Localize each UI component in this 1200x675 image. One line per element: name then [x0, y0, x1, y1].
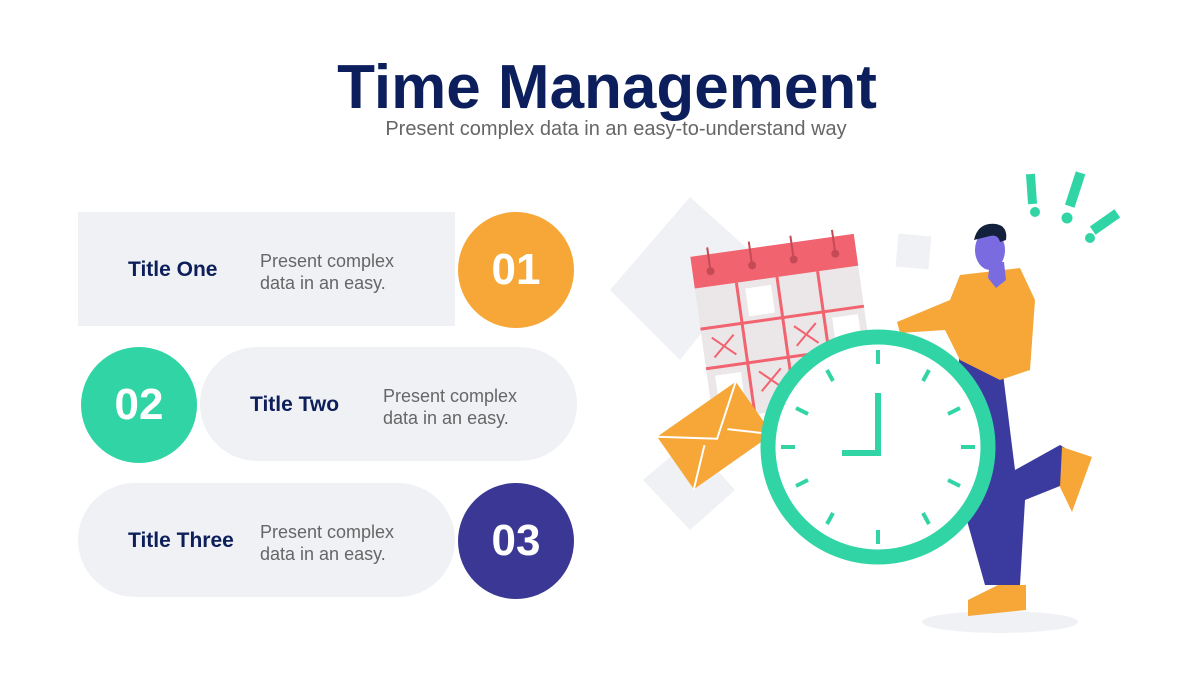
icon: exclamation marks	[1026, 171, 1120, 243]
badge 03: 03	[492, 516, 540, 565]
panel: item two	[81, 347, 577, 463]
text: item one description: Present complex	[260, 251, 394, 271]
panel: item one	[78, 212, 574, 328]
heading: Title One: Title One	[128, 258, 217, 281]
badge 01	[458, 212, 574, 328]
badge 02: 02	[115, 380, 163, 429]
text: item three description: data in an easy.	[260, 544, 386, 564]
text: item two description	[383, 386, 517, 428]
heading: Title Two: Title Two	[250, 393, 339, 416]
icon: calendar	[689, 227, 877, 420]
text: item one description	[260, 251, 394, 293]
badge 01: 01	[492, 245, 540, 294]
person	[897, 224, 1092, 616]
text: item three description	[260, 522, 394, 564]
subtitle: Present complex data in an easy-to-understand way	[385, 118, 847, 140]
text: item two description: data in an easy.	[383, 408, 509, 428]
badge 02	[81, 347, 197, 463]
panel: item three	[78, 483, 574, 599]
background shapes	[610, 197, 1078, 633]
text: item three description: Present complex	[260, 522, 394, 542]
icon: clock	[768, 337, 988, 557]
badge 03	[458, 483, 574, 599]
title: Time Management	[337, 53, 877, 122]
heading: Title Three: Title Three	[128, 529, 234, 552]
text: item one description: data in an easy.	[260, 273, 386, 293]
icon: envelope	[657, 382, 772, 489]
text: item two description: Present complex	[383, 386, 517, 406]
